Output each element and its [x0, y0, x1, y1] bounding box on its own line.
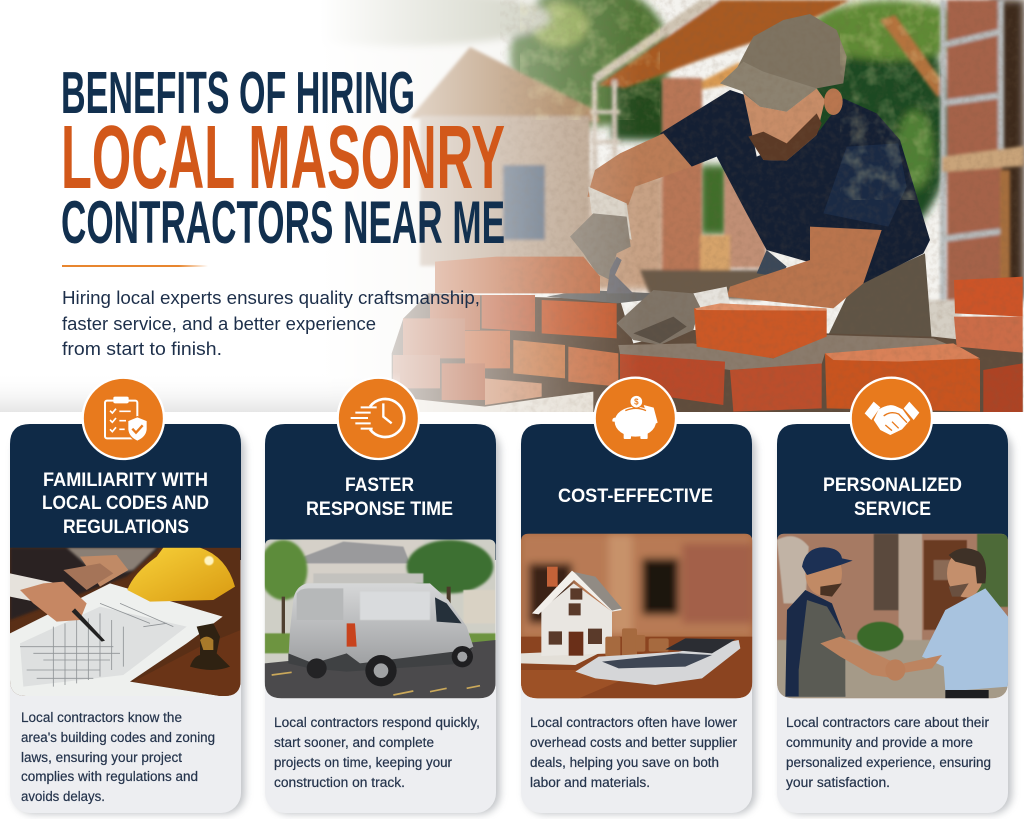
panel: cost-effective — [521, 378, 752, 813]
photo: work van — [259, 539, 496, 698]
intro text — [62, 288, 480, 359]
body text: laws, ensuring your project — [21, 750, 182, 765]
heading: SERVICE — [854, 498, 931, 520]
panel: faster response time — [259, 378, 496, 813]
photo grain — [500, 0, 1024, 412]
orange gable building — [590, 0, 1024, 345]
heading: LOCAL CODES AND — [42, 492, 209, 514]
body text: labor and materials. — [530, 775, 650, 790]
intro text: faster service, and a better experience — [62, 314, 376, 334]
heading — [42, 469, 209, 538]
body text: your satisfaction. — [786, 775, 890, 790]
body text: Local contractors often have lower — [530, 715, 737, 730]
heading: FASTER — [345, 474, 414, 496]
body text: avoids delays. — [21, 789, 105, 804]
body text: construction on track. — [274, 775, 405, 790]
body text: area's building codes and zoning — [21, 730, 215, 745]
heading: COST-EFFECTIVE — [558, 485, 713, 507]
photo: handshake — [777, 534, 1008, 698]
icon: piggy bank: $ — [634, 397, 639, 406]
body text: projects on time, keeping your — [274, 755, 452, 770]
body text: start sooner, and complete — [274, 735, 434, 750]
intro text: from start to finish. — [62, 339, 222, 359]
body text: overhead costs and better supplier — [530, 735, 737, 750]
icon: piggy bank — [595, 378, 676, 459]
faded house — [410, 47, 600, 266]
body text — [530, 715, 737, 790]
shirt — [660, 90, 930, 283]
heading: FAMILIARITY WITH — [43, 469, 208, 491]
hero photo: mason laying bricks — [0, 0, 1024, 420]
panel: personalized service — [777, 378, 1008, 813]
icon: checklist with shield — [83, 378, 164, 459]
card shadows — [14, 430, 1012, 814]
body text: complies with regulations and — [21, 769, 198, 784]
title — [61, 60, 505, 256]
body text: deals, helping you save on both — [530, 755, 719, 770]
cap — [733, 14, 847, 112]
title: BENEFITS OF HIRING — [61, 60, 415, 126]
body text — [21, 710, 215, 804]
title: LOCAL MASONRY — [61, 108, 505, 208]
body text: Local contractors care about their — [786, 715, 990, 730]
body text: personalized experience, ensuring — [786, 755, 991, 770]
body text — [274, 715, 480, 790]
body text: Local contractors respond quickly, — [274, 715, 480, 730]
left fade overlay — [246, 0, 624, 412]
icon: fast clock — [338, 378, 419, 459]
arms — [587, 133, 692, 205]
photo: blueprints and hard hat — [10, 548, 241, 696]
intro text: Hiring local experts ensures quality craftsmanship, — [62, 288, 480, 308]
heading — [823, 474, 962, 520]
background trees — [358, 0, 1024, 306]
mason figure — [392, 14, 1023, 420]
heading — [306, 474, 453, 520]
title divider — [62, 265, 208, 267]
mortar and brick wall — [392, 293, 1023, 420]
body text — [786, 715, 991, 790]
icon: handshake — [851, 378, 932, 459]
pants — [827, 253, 932, 340]
title: CONTRACTORS NEAR ME — [61, 189, 505, 256]
heading: PERSONALIZED — [823, 474, 962, 496]
gloves and trowel — [588, 187, 632, 240]
body text: Local contractors know the — [21, 710, 182, 725]
heading: REGULATIONS — [63, 516, 189, 538]
panel: familiarity with local codes — [10, 378, 241, 813]
photo: model house and calculator — [521, 534, 752, 698]
head — [743, 88, 825, 161]
body text: community and provide a more — [786, 735, 973, 750]
heading: RESPONSE TIME — [306, 498, 453, 520]
